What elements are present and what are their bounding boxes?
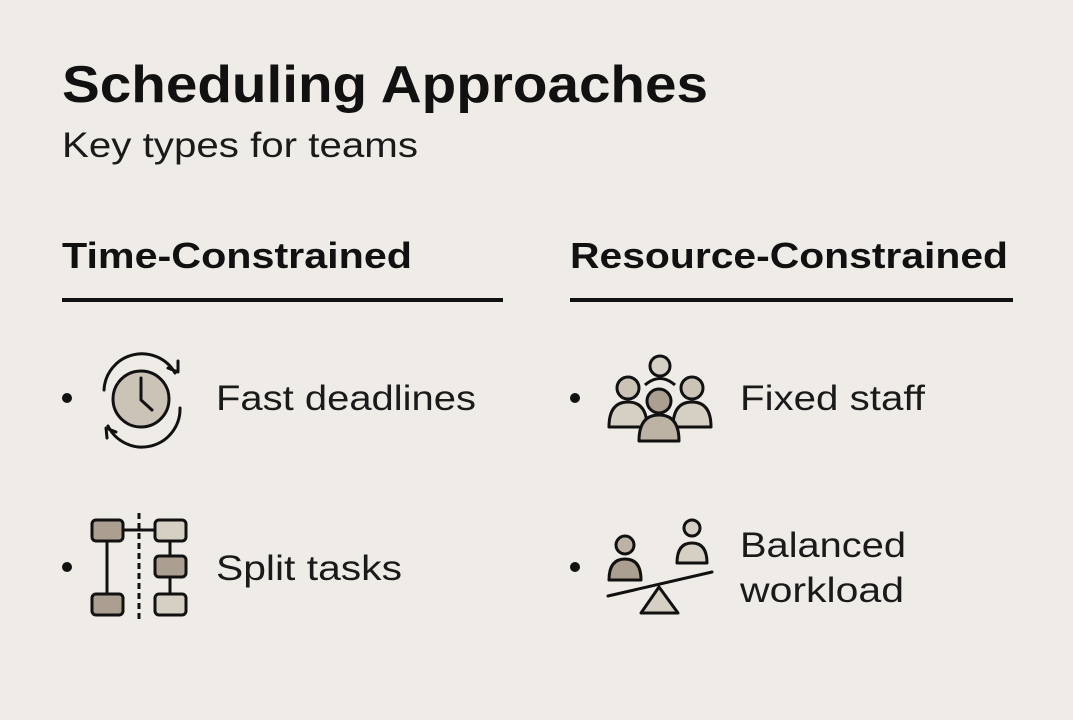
- item: fast deadlines: Fast deadlines: [216, 379, 476, 418]
- heading: time-constrained: Time-Constrained: [62, 235, 412, 276]
- title: Scheduling Approaches: [62, 56, 708, 114]
- heading: resource-constrained: Resource-Constrained: [570, 235, 1008, 276]
- item: balanced workload: workload: [739, 571, 904, 610]
- icon: seesaw balance: [608, 520, 712, 613]
- item: balanced workload: [570, 520, 906, 613]
- heading: time-constrained: [62, 235, 503, 302]
- item: balanced workload: Balanced: [740, 526, 906, 565]
- icon: group of people: [609, 356, 711, 441]
- item: fixed staff: [570, 356, 925, 441]
- item: fixed staff: Fixed staff: [740, 379, 925, 418]
- icon: split tasks: [92, 513, 186, 622]
- item: split tasks: Split tasks: [216, 549, 402, 588]
- subtitle: Key types for teams: [62, 126, 418, 165]
- item: fast deadlines: [62, 354, 476, 447]
- heading: resource-constrained: [570, 235, 1013, 302]
- icon: clock with arrows: [104, 354, 180, 447]
- item: split tasks: [62, 513, 402, 622]
